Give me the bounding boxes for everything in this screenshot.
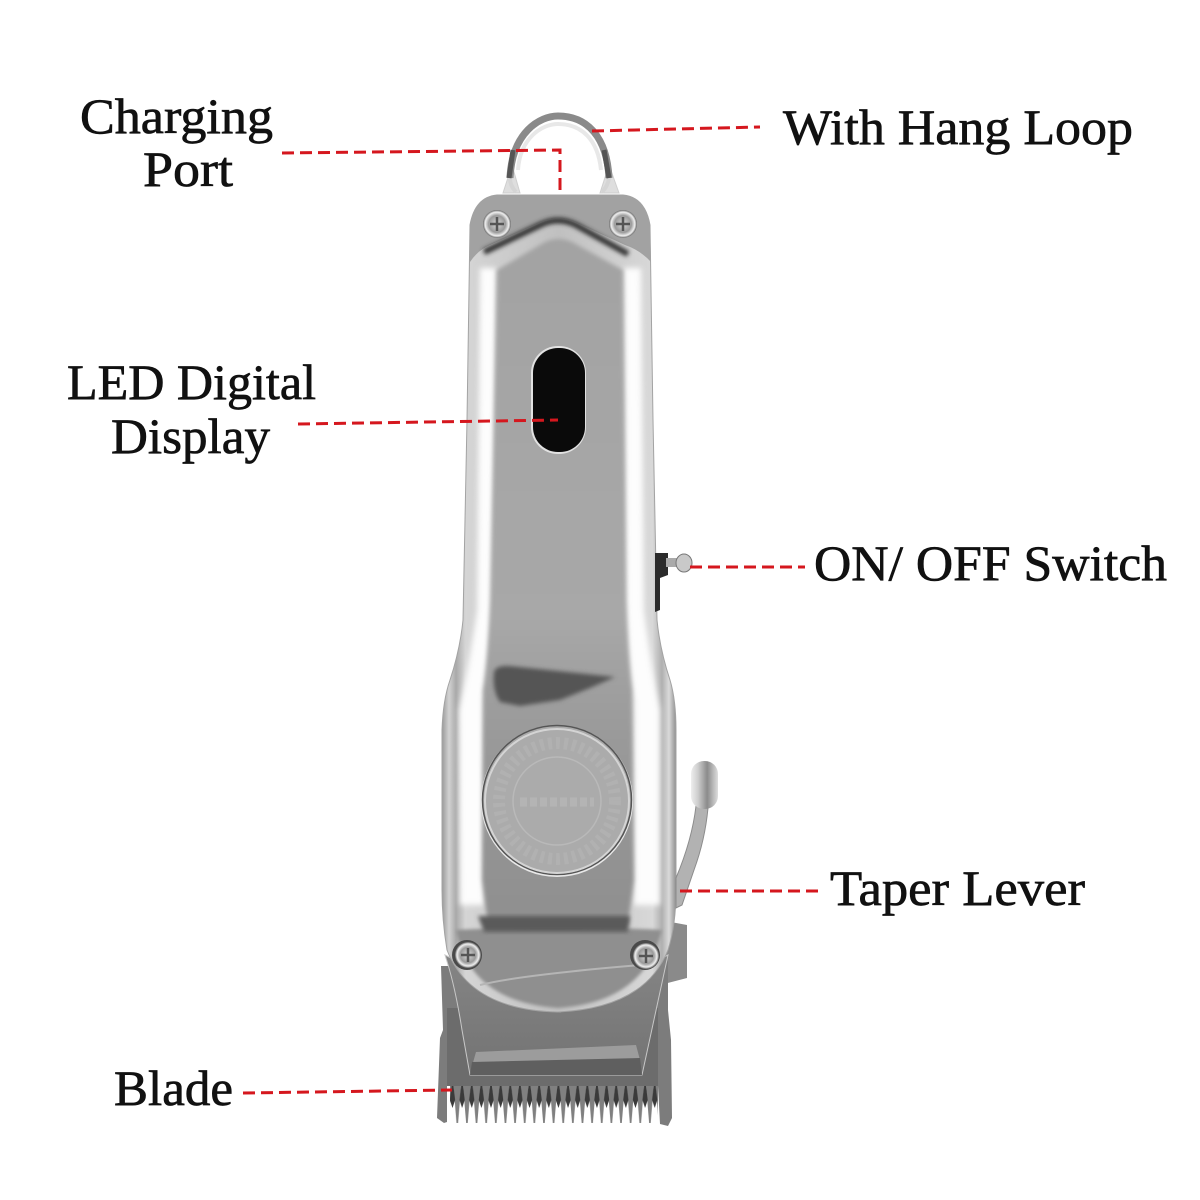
leader: on/off switch bbox=[690, 566, 805, 568]
emblem disc bbox=[481, 725, 633, 877]
label: LED digital display: LED Digital bbox=[67, 354, 316, 410]
leader: taper lever bbox=[680, 890, 818, 892]
blade teeth bbox=[450, 1086, 658, 1126]
top plate bbox=[470, 195, 651, 262]
lever mount bbox=[660, 920, 687, 985]
leader: hang loop bbox=[592, 127, 760, 131]
label: charging port bbox=[80, 88, 273, 197]
LED display bbox=[531, 346, 586, 454]
label: charging port: Port bbox=[143, 141, 233, 197]
leader: blade bbox=[243, 1090, 452, 1093]
label: taper lever: Taper Lever bbox=[830, 860, 1085, 916]
label: LED digital display: Display bbox=[111, 408, 270, 464]
leader: charging port bbox=[282, 150, 560, 195]
label: hang loop: With Hang Loop bbox=[783, 99, 1133, 155]
highlight strips bbox=[459, 268, 660, 905]
blade assembly bbox=[437, 920, 687, 1126]
label: blade: Blade bbox=[114, 1060, 233, 1116]
blade back plate bbox=[437, 966, 470, 1123]
clear blade cover bbox=[445, 955, 668, 1075]
leader: LED display bbox=[298, 420, 558, 424]
label: LED digital display bbox=[67, 354, 316, 464]
blade plate bbox=[447, 1008, 658, 1086]
icon: hang loop bbox=[503, 116, 619, 193]
centre panel bbox=[482, 239, 634, 925]
on/off switch bbox=[655, 553, 692, 612]
label: on/off switch: ON/ OFF Switch bbox=[814, 535, 1167, 591]
reflection: dark patch bbox=[494, 666, 615, 706]
illustration: hair clipper bbox=[437, 116, 718, 1126]
label: charging port: Charging bbox=[80, 88, 273, 144]
clipper body bbox=[442, 195, 676, 1012]
taper lever bbox=[676, 761, 718, 908]
lower body: dark band and cover area bbox=[456, 928, 662, 1008]
screws bbox=[452, 210, 660, 970]
leader lines bbox=[243, 127, 818, 1093]
